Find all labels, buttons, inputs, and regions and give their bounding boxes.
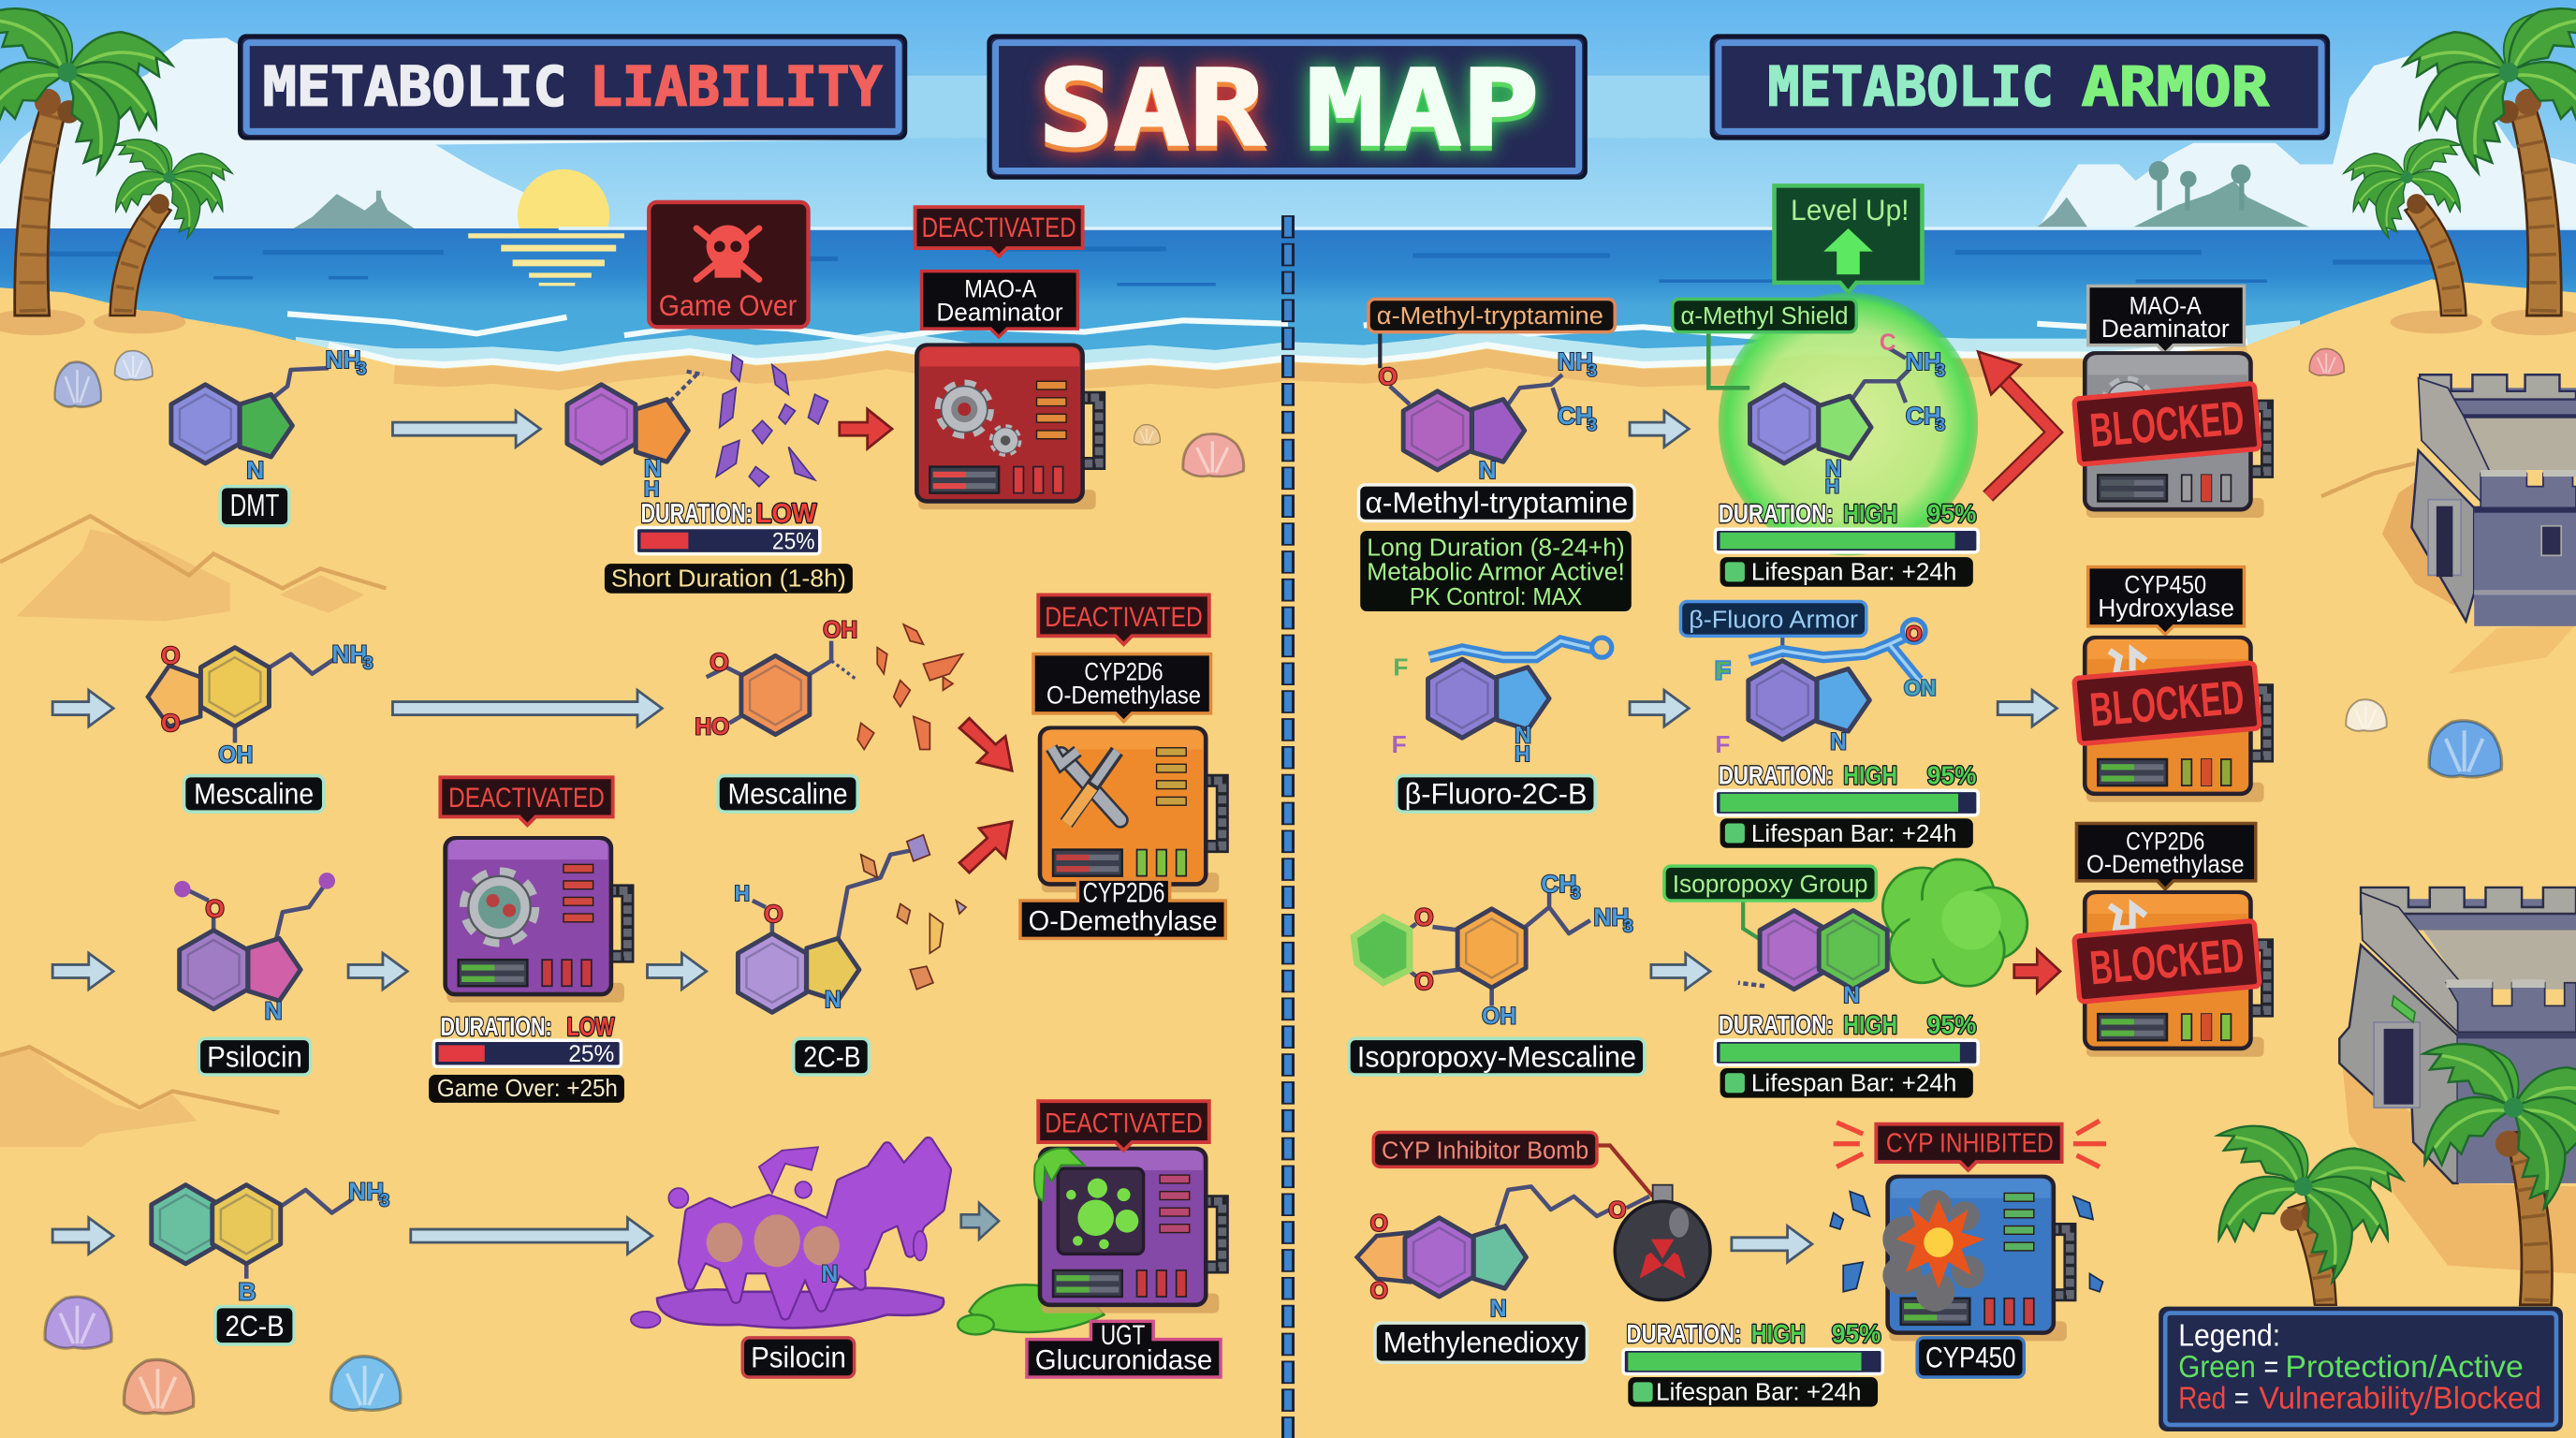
note: short duration: Short Duration (1-8h) [611,565,846,593]
badge: deactivated 3: DEACTIVATED [448,783,605,814]
duration widget: high 2: DURATION: [1719,760,1834,789]
note: lifespan bar 4: Lifespan Bar: +24h [1656,1378,1862,1406]
arrow: grey to UGT [961,1203,999,1240]
molecule: isopropoxy-mescaline: OH [1482,1005,1516,1030]
machine: red MAO-A [916,345,1099,509]
badge: blocked 1: BLOCKED [2087,390,2247,457]
duration widget: high 2 [1715,760,1978,815]
label: UGT Glucuronidase [1027,1320,1221,1377]
lower palm, left [2208,1103,2405,1305]
molecule: DMT: N [246,456,264,484]
label: alpha methyl shield [1673,299,1856,388]
sky background [0,0,2576,230]
molecule: beta-fluoro-2C-B: H [1515,741,1530,766]
molecule: isopropoxy-mescaline: NH [1593,902,1629,931]
molecule: beta-fluoro-2C-B: F [1392,730,1407,758]
label: MAO-A Deaminator (right): Deaminator [2101,314,2230,343]
lower palm, right [2413,1020,2576,1305]
label: DMT: DMT [230,489,279,523]
label: UGT Glucuronidase: Glucuronidase [1035,1344,1212,1375]
duration widget: low 2 [433,1012,621,1067]
badge: deactivated 4 [1038,1101,1209,1151]
arrow: 2C-B long [411,1218,652,1254]
machine: purple UGT [1034,1149,1222,1313]
molecule: shielded amt [1750,330,1946,498]
arrow: red to CYP2D6 [2014,950,2060,992]
label: beta-fluoro-2C-B: β-Fluoro-2C-B [1405,776,1587,810]
sea texture [50,246,2432,286]
shield sphere [1719,292,1978,555]
molecule: mescaline: O [161,709,180,737]
left palm, large [0,0,174,335]
arrow: machine to 2C-B [648,953,707,990]
upper sand castle [2411,374,2576,626]
right palm, large [2402,0,2576,335]
callout: level up [1775,185,1922,292]
molecule: mescaline metabolite: O [710,648,729,676]
icon: purple slime psilocin [631,1142,946,1328]
molecule: fluoro armored: N [1830,729,1847,755]
shoreline foam [329,342,2247,368]
arrow: bomb to CYP450 [1732,1226,1812,1262]
callout: level up: Level Up! [1791,193,1909,227]
title panel: SAR MAP: MAP [1306,48,1540,169]
label: MAO-A Deaminator (left): MAO-A [964,274,1037,303]
molecule: isopropoxy-mescaline [1354,870,1633,1030]
title panel: metabolic armor [1712,37,2328,138]
molecule: methylenedioxy: O [1370,1279,1388,1304]
duration widget: high 1 [1715,499,1978,552]
molecule: 2C-B degraded [735,848,923,1013]
duration widget: low 2: DURATION: [440,1012,552,1041]
duration widget: low 1: 25% [772,529,815,554]
duration widget: low 1 [636,499,820,554]
molecule: psilocin [174,873,335,1024]
molecule: beta-fluoro-2C-B [1392,638,1612,766]
molecule: mescaline metabolite: HO [695,715,729,741]
duration widget: high 1: HIGH [1843,499,1897,528]
fragments: orange [857,624,962,749]
molecule: 2C-B degraded: N [825,988,842,1013]
machine: purple with broken gear [446,838,627,1003]
label: CYP2D6 O-Demethylase top: O-Demethylase [1046,680,1201,709]
label: mescaline metabolite: Mescaline [728,776,848,810]
center divider [1284,215,1292,1438]
molecule: degraded DMT [567,372,703,501]
label: psilocin: Psilocin [207,1039,302,1073]
arrow: to CYP450 blocked [1998,690,2056,726]
badge: deactivated 4: DEACTIVATED [1045,1108,1203,1138]
legend: = [2234,1381,2249,1416]
molecule: fluoro armored: O [1906,622,1923,646]
note: game over +25h: Game Over: +25h [437,1076,618,1102]
label: isopropoxy group [1664,866,1876,940]
label: MAO-A Deaminator (right): MAO-A [2130,290,2203,319]
molecule: isopropoxy-mescaline: CH [1541,870,1576,898]
label: mescaline: Mescaline [194,776,314,810]
label: CYP450 Hydroxylase [2088,567,2244,635]
molecule: mescaline: OH [218,743,253,769]
duration widget: high 2: HIGH [1843,760,1897,789]
machine: blue exploding CYP450 [1882,1177,2070,1341]
molecule: shielded amt: C [1880,330,1896,356]
molecule: isopropoxy-mescaline: O [1414,967,1434,995]
duration widget: high 3: 95% [1927,1010,1976,1039]
molecule: psilocin: O [205,895,225,923]
right palm, small [2343,125,2482,333]
label: MAO-A Deaminator (left) [922,271,1077,337]
molecule: fluoro armored: ON [1904,676,1936,700]
explosion debris [1830,1192,2103,1292]
lower sand castle [2339,888,2576,1183]
molecule: alpha-methyl-tryptamine: 3 [1587,416,1597,435]
arrow: to fluoro armor [1630,690,1689,726]
badge: deactivated 2: DEACTIVATED [1045,602,1203,633]
legend: Red [2178,1381,2226,1416]
molecule: DMT: 3 [357,360,367,379]
label: CYP2D6 O-Demethylase right: O-Demethylase [2086,849,2244,878]
fragments: purple [716,355,828,487]
legend [2160,1308,2561,1430]
molecule: methylenedioxy [1357,1186,1649,1322]
molecule: isopropoxy-mescaline: 3 [1571,884,1581,903]
molecule: degraded DMT: H [644,477,659,501]
arrow: red down to CYP2D6 [959,718,1012,770]
clouds [0,37,2576,230]
icon: bomb [1615,1185,1710,1300]
sun [518,169,609,261]
badge: CYP inhibited [1834,1121,2106,1170]
title panel: SAR MAP [989,37,1586,178]
badge: blocked 3 [2074,920,2260,1002]
label: alpha methyl shield: α-Methyl Shield [1680,301,1848,330]
badge: deactivated 2 [1038,594,1209,644]
duration widget: high 4: DURATION: [1627,1319,1741,1348]
molecule: methylenedioxy: N [1490,1297,1507,1322]
label: alpha-methyl-tryptamine tag: α-Methyl-tryptamine [1377,301,1603,330]
badge: blocked 2: BLOCKED [2087,670,2247,737]
label: isopropoxy-mescaline: Isopropoxy-Mescaline [1357,1039,1636,1073]
sea [0,228,2576,385]
machine: orange blocked CYP2D6 [2085,892,2267,1057]
left island [283,191,424,237]
duration widget: low 1: DURATION: [640,499,753,529]
duration widget: high 3: HIGH [1843,1010,1897,1039]
sea waves [287,314,2217,340]
molecule: fluoro armored: F [1715,730,1730,758]
molecule: shielded amt: 3 [1936,361,1946,381]
badge: blocked 3: BLOCKED [2087,928,2247,994]
arrow: to isopropoxy [1651,953,1710,990]
molecule: mescaline metabolite: OH [823,618,857,643]
molecule: 2C-B: NH [348,1177,384,1205]
left palm, small [94,125,233,333]
arrow: red to MAO-A [840,409,892,448]
arrow: amt to shield [1630,411,1689,447]
duration widget: high 1: DURATION: [1719,499,1834,528]
molecule: methylenedioxy: O [1608,1198,1626,1224]
arrow: into 2C-B [52,1218,113,1254]
legend: Protection/Active [2285,1350,2524,1385]
label: CYP2D6 O-Demethylase top: CYP2D6 [1084,657,1164,686]
badge: blocked 1 [2074,383,2260,464]
note: long duration: Metabolic Armor Active! [1367,558,1625,586]
arrow: into mescaline [52,690,113,726]
molecule: 2C-B: B [238,1278,256,1306]
duration widget: high 4 [1623,1319,1882,1374]
molecule: mescaline [148,639,373,769]
label: UGT Glucuronidase: UGT [1101,1320,1145,1351]
title panel: metabolic liability [240,37,905,138]
title panel: metabolic liability: LIABILITY [590,54,883,118]
note: long duration: PK Control: MAX [1410,582,1582,610]
arrow: DMT to metabolite [392,411,540,447]
molecule: isopropoxy-mescaline: O [1414,902,1434,931]
label: methylenedioxy: Methylenedioxy [1383,1326,1579,1359]
molecule: beta-fluoro-2C-B: N [1515,723,1531,748]
duration widget: high 4: 95% [1832,1319,1881,1348]
arrow: into psilocin [52,953,113,990]
arrow: mescaline long [392,690,662,726]
molecule: alpha-methyl-tryptamine: NH [1558,347,1593,375]
molecule: psilocin: N [265,996,283,1024]
sun reflection [468,233,624,286]
molecule: 2C-B [152,1177,389,1306]
molecule: shielded amt: N [1825,457,1842,482]
legend: Green [2178,1350,2256,1385]
molecule: degraded DMT: N [644,454,662,482]
legend: Vulnerability/Blocked [2259,1381,2541,1416]
label: CYP2D6 O-Demethylase right: CYP2D6 [2126,827,2204,856]
arrow: psilocin to machine [348,953,407,990]
machine: grey blocked MAO-A [2085,353,2267,518]
molecule: mescaline metabolite [695,618,857,741]
molecule: fluoro armored [1715,620,1936,758]
duration widget: high 2: 95% [1927,760,1976,789]
duration widget: low 2: LOW [567,1012,615,1041]
callout: game over: Game Over [659,288,797,322]
molecule: shielded amt: H [1825,477,1839,498]
fragments: mixed [861,835,966,990]
duration widget: low 2: 25% [568,1042,614,1067]
shells, upper [55,348,2502,777]
legend: = [2264,1350,2278,1385]
note: lifespan bar 1: Lifespan Bar: +24h [1751,558,1956,586]
molecule: DMT [171,345,367,484]
molecule: shielded amt: 3 [1936,416,1946,435]
label: CYP2D6 O-Demethylase bottom: O-Demethylase [1029,906,1218,937]
label: MAO-A Deaminator (left): Deaminator [936,297,1063,326]
title panel: metabolic armor: ARMOR [2082,54,2269,118]
label: beta-fluoro armor: β-Fluoro Armor [1689,606,1858,634]
horizon line [559,227,2576,230]
label: MAO-A Deaminator (right) [2088,286,2244,353]
label: CYP450 Hydroxylase: CYP450 [2124,570,2206,599]
molecule: methylenedioxy: O [1370,1211,1388,1237]
molecule: 2C-B: 3 [379,1191,389,1211]
molecule: isopropoxy armored [1738,911,1887,1008]
foam band [296,320,2300,370]
shells, lower [45,1297,401,1414]
label: psilocin red: Psilocin [751,1341,846,1374]
label: CYP inhibitor bomb [1373,1132,1653,1196]
molecule: 2C-B degraded: H [735,881,750,905]
legend: Legend: [2178,1319,2280,1354]
right islands [2027,161,2326,237]
label: 2C-B mid: 2C-B [803,1039,861,1073]
machine: orange CYP2D6 with tools [1040,728,1222,892]
molecule: fluoro armored: F [1715,656,1730,684]
molecule: alpha-methyl-tryptamine: O [1379,362,1398,390]
label: isopropoxy group: Isopropoxy Group [1673,870,1868,898]
label: CYP2D6 O-Demethylase top [1033,654,1211,722]
note: lifespan bar 2: Lifespan Bar: +24h [1751,819,1956,847]
molecule: shielded amt: NH [1906,347,1941,375]
green shield blob [1882,859,2027,986]
callout: game over [649,202,809,327]
duration widget: high 4: HIGH [1751,1319,1806,1348]
label: DMT [220,487,289,526]
duration widget: high 1: 95% [1927,499,1976,528]
label: CYP inhibitor bomb: CYP Inhibitor Bomb [1382,1137,1588,1165]
dunes [0,463,2576,1273]
note: long duration [1360,531,1632,611]
label: CYP2D6 O-Demethylase bottom [1020,878,1225,938]
badge: blocked 2 [2074,663,2260,744]
molecule: shielded amt: CH [1906,402,1941,430]
molecule: alpha-methyl-tryptamine [1379,347,1597,484]
label: alpha-methyl-tryptamine: α-Methyl-tryptamine [1365,486,1628,520]
badge: deactivated 3 [440,777,613,825]
note: long duration: Long Duration (8-24+h) [1367,533,1625,561]
molecule: 2C-B degraded: O [764,900,783,928]
badge: deactivated 1: DEACTIVATED [922,213,1076,243]
halftone strips [907,76,1710,138]
duration widget: high 3 [1715,1010,1978,1065]
badge: CYP inhibited: CYP INHIBITED [1886,1129,2054,1159]
title panel: metabolic liability: METABOLIC [263,54,567,118]
icon: purple slime psilocin: N [822,1262,838,1287]
wet sand band [394,355,2247,381]
label: 2C-B left: 2C-B [225,1309,285,1343]
label: CYP2D6 O-Demethylase right [2076,823,2256,889]
molecule: mescaline: O [161,641,180,669]
molecule: alpha-methyl-tryptamine: N [1479,456,1497,484]
label: CYP2D6 O-Demethylase bottom: CYP2D6 [1083,878,1164,909]
label: CYP450: CYP450 [1925,1341,2016,1374]
molecule: mescaline: 3 [363,653,373,673]
badge: deactivated 1 [915,207,1083,257]
arrow: red deflect chevron [1978,352,2054,496]
machine: orange blocked CYP450 [2085,638,2267,802]
molecule: isopropoxy armored: N [1843,983,1860,1008]
green slime pool [958,1284,1104,1334]
molecule: beta-fluoro-2C-B: F [1393,653,1408,681]
title panel: SAR MAP: SAR [1038,48,1266,169]
molecule: alpha-methyl-tryptamine: 3 [1587,361,1597,381]
label: beta-fluoro armor [1680,601,1866,657]
molecule: DMT: NH [326,345,361,374]
molecule: isopropoxy-mescaline: 3 [1623,917,1633,936]
molecule: mescaline: NH [332,639,368,668]
arrow: red up to CYP2D6 [959,822,1012,873]
duration widget: high 3: DURATION: [1719,1010,1834,1039]
label: CYP450 Hydroxylase: Hydroxylase [2098,593,2234,622]
note: lifespan bar 3: Lifespan Bar: +24h [1751,1069,1956,1097]
title panel: metabolic armor: METABOLIC [1767,54,2054,118]
label: alpha-methyl-tryptamine tag [1368,299,1615,368]
molecule: alpha-methyl-tryptamine: CH [1558,402,1593,430]
duration widget: low 1: LOW [755,499,817,529]
